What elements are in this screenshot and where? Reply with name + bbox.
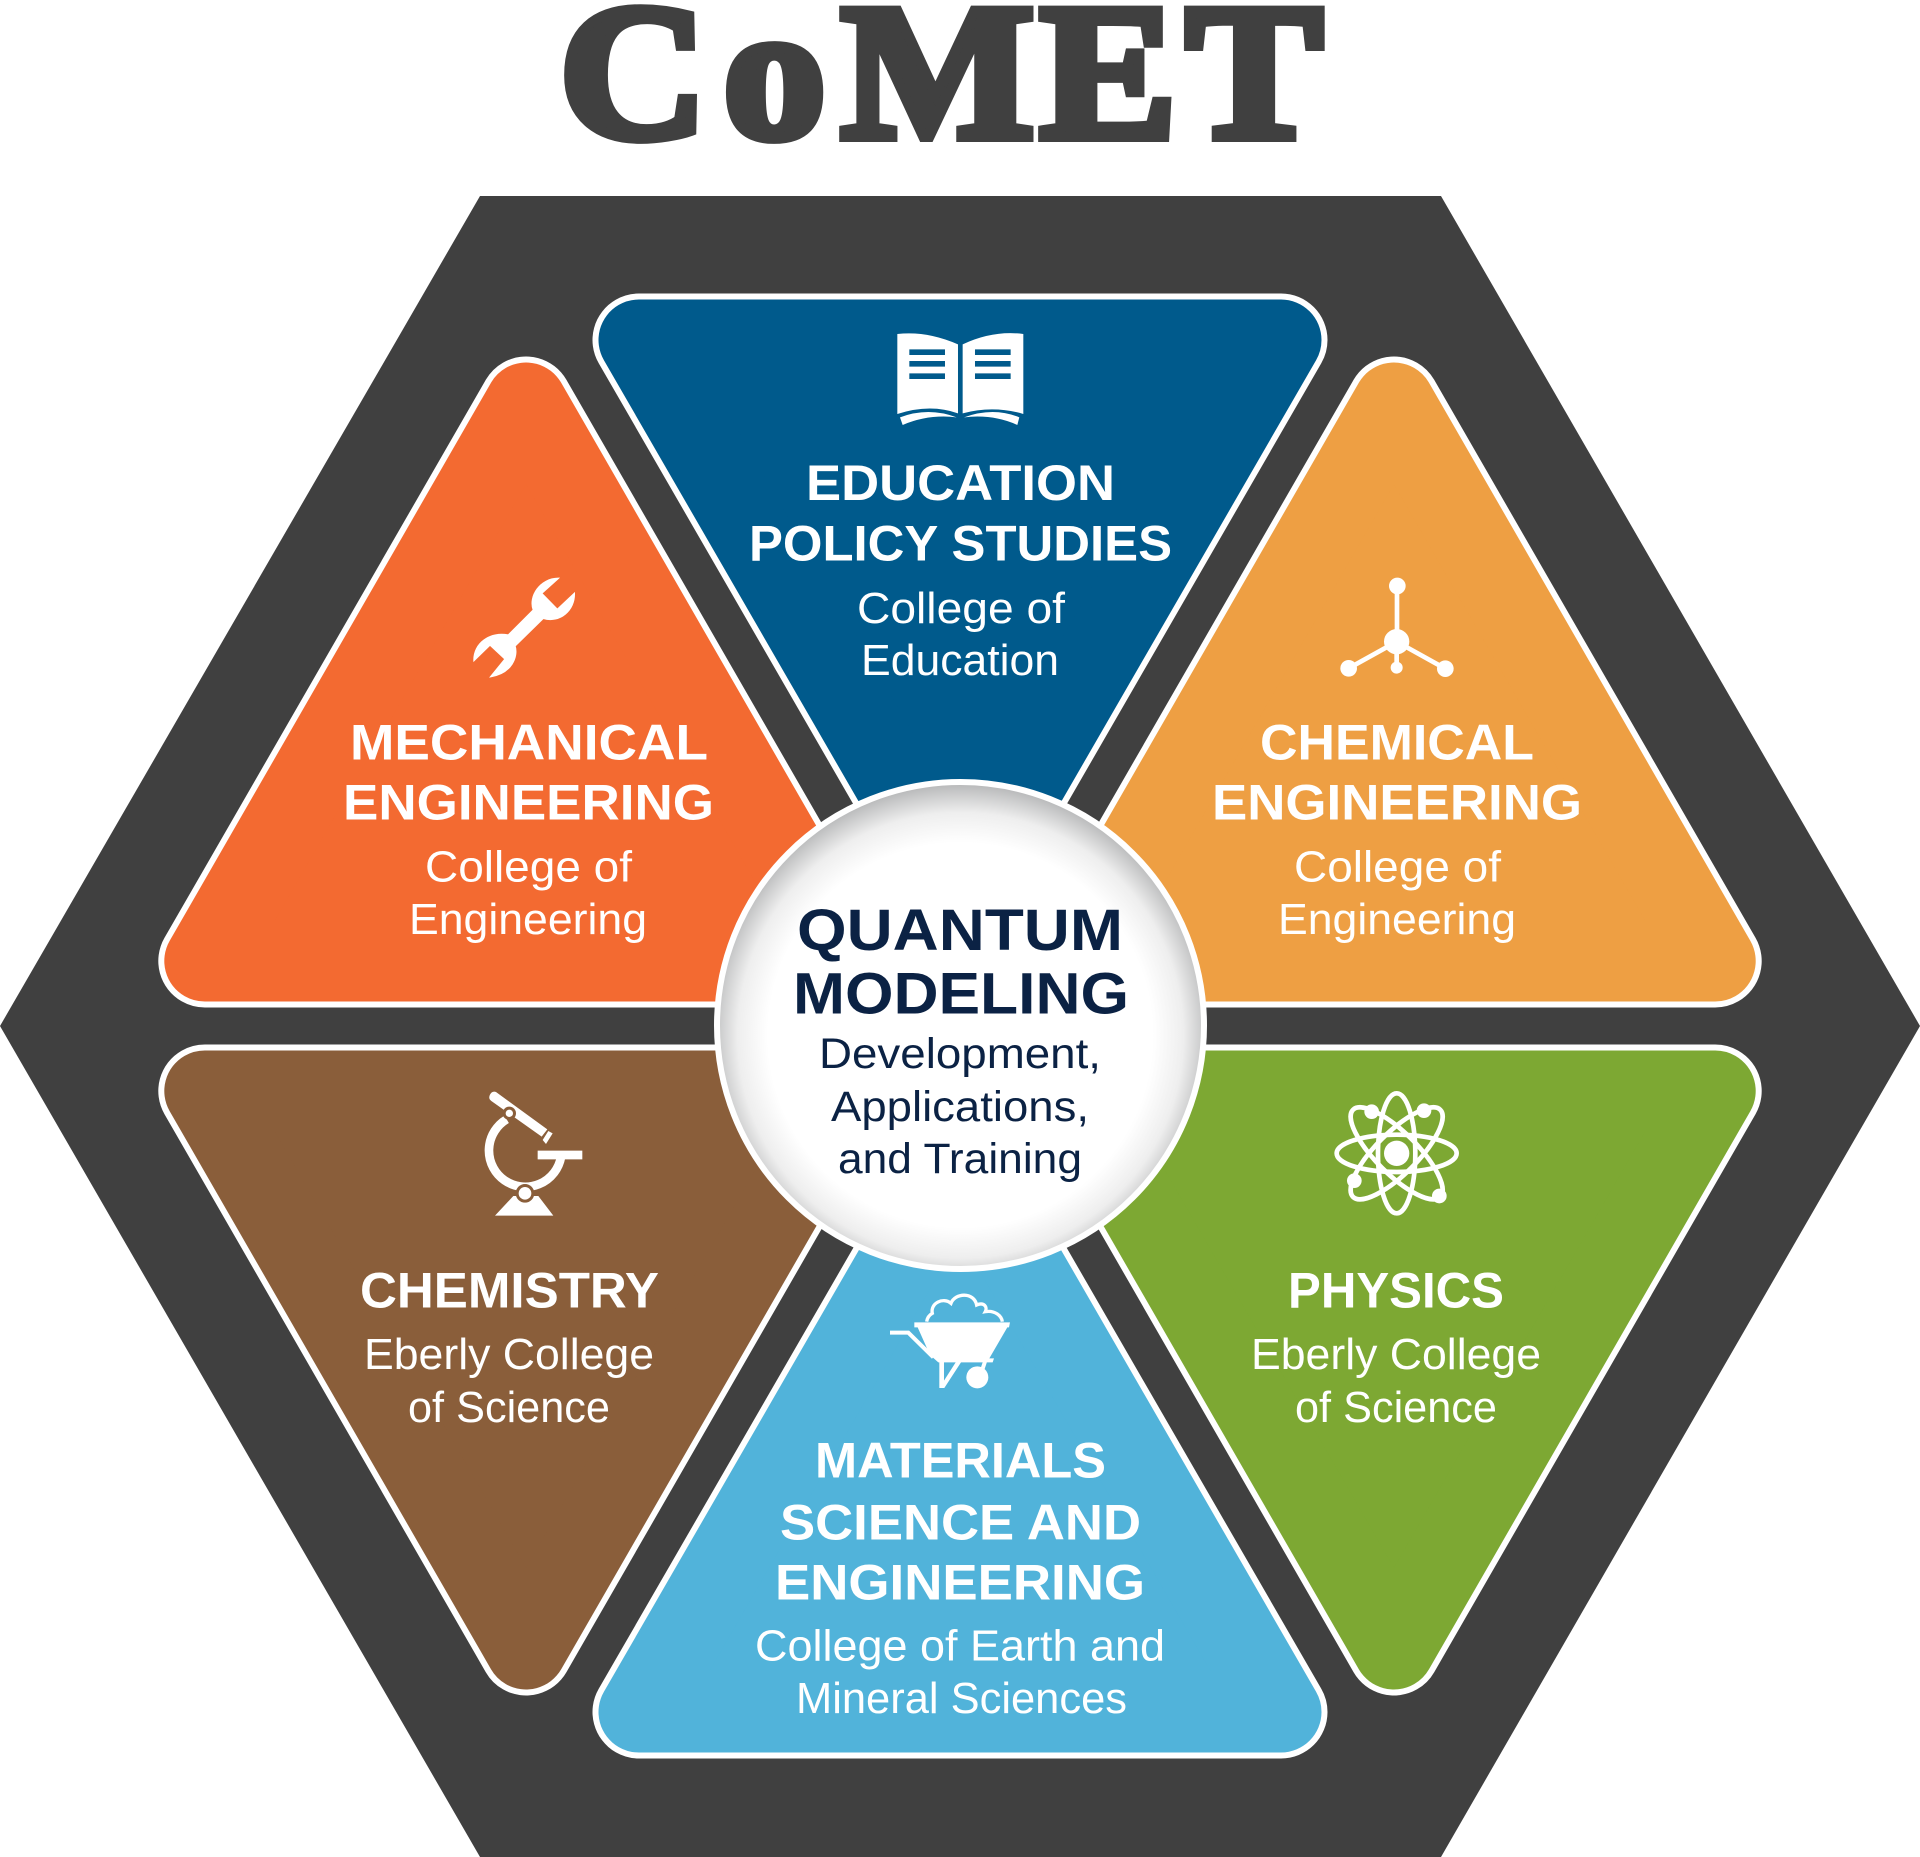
icon: molecule: [1340, 578, 1454, 677]
text: college of education: College of: [857, 584, 1066, 633]
heading: materials science and engineering: [775, 1432, 1145, 1610]
text: college of engineering: [409, 842, 647, 944]
heading: materials science and engineering: ENGINEERING: [775, 1554, 1145, 1610]
heading: chemical engineering: CHEMICAL: [1260, 714, 1534, 770]
text: college of engineering: [1278, 842, 1516, 944]
panel: education policy studies: [639, 333, 1281, 896]
heading: mechanical engineering: [343, 714, 714, 830]
panel: physics: [1073, 1091, 1715, 1649]
heading: mechanical engineering: MECHANICAL: [350, 714, 708, 770]
panel: centre circle: [717, 782, 1204, 1269]
heading: chemical engineering: [1212, 714, 1582, 830]
text: college of engineering: College of: [425, 842, 633, 892]
text: development, applications, and training: [819, 1030, 1101, 1183]
triangle: blue: [639, 340, 1281, 896]
text: development, applications, and training: and Training: [838, 1135, 1082, 1183]
heading: mechanical engineering: ENGINEERING: [343, 774, 714, 830]
panel: chemical engineering: [1073, 403, 1715, 961]
text: eberly college of science: Eberly College: [364, 1330, 654, 1379]
heading: education policy studies: [749, 455, 1172, 572]
heading: quantum modeling: QUANTUM: [797, 898, 1123, 963]
icon: wrench: [474, 578, 574, 677]
heading: education policy studies: POLICY STUDIES: [749, 516, 1172, 572]
heading: physics: PHYSICS: [1288, 1262, 1504, 1318]
heading: quantum modeling: MODELING: [793, 962, 1129, 1026]
triangle: amber: [1073, 403, 1715, 961]
icon: wheelbarrow: [890, 1295, 1010, 1388]
text: eberly college of science: Eberly College: [1251, 1330, 1541, 1379]
icon: atom: [1337, 1093, 1457, 1213]
heading: quantum modeling: [793, 898, 1129, 1026]
text: development, applications, and training: Applications,: [831, 1083, 1089, 1131]
text: eberly college of science: [364, 1330, 654, 1432]
text: college of earth and mineral sciences: [755, 1622, 1165, 1723]
panel: mechanical engineering: [205, 403, 847, 961]
text: college of earth and mineral sciences: Mineral Sciences: [796, 1674, 1127, 1723]
icon: microscope: [489, 1092, 582, 1216]
panel: materials science and engineering: [639, 1156, 1281, 1723]
heading: education policy studies: EDUCATION: [806, 455, 1115, 511]
triangle: green: [1073, 1091, 1715, 1649]
text: college of earth and mineral sciences: College of Earth and: [755, 1622, 1165, 1670]
text: college of engineering: Engineering: [1278, 895, 1516, 944]
heading: materials science and engineering: SCIENCE AND: [780, 1494, 1141, 1550]
triangle: light blue: [639, 1156, 1281, 1712]
heading: chemical engineering: ENGINEERING: [1212, 774, 1582, 830]
text: college of engineering: Engineering: [409, 895, 647, 944]
text: eberly college of science: of Science: [408, 1383, 610, 1432]
text: college of engineering: College of: [1294, 842, 1502, 892]
triangle: orange: [205, 403, 847, 961]
icon: open book: [897, 333, 1023, 425]
text: development, applications, and training: Development,: [819, 1030, 1101, 1078]
panel: chemistry: [205, 1091, 847, 1649]
text: college of education: [857, 584, 1066, 685]
text: eberly college of science: of Science: [1295, 1383, 1497, 1432]
heading: chemistry: CHEMISTRY: [360, 1262, 659, 1318]
text: college of education: Education: [861, 636, 1059, 685]
triangle: brown: [205, 1091, 847, 1649]
text: eberly college of science: [1251, 1330, 1541, 1432]
circle: white sphere: [717, 782, 1204, 1269]
heading: materials science and engineering: MATERIALS: [815, 1432, 1106, 1488]
